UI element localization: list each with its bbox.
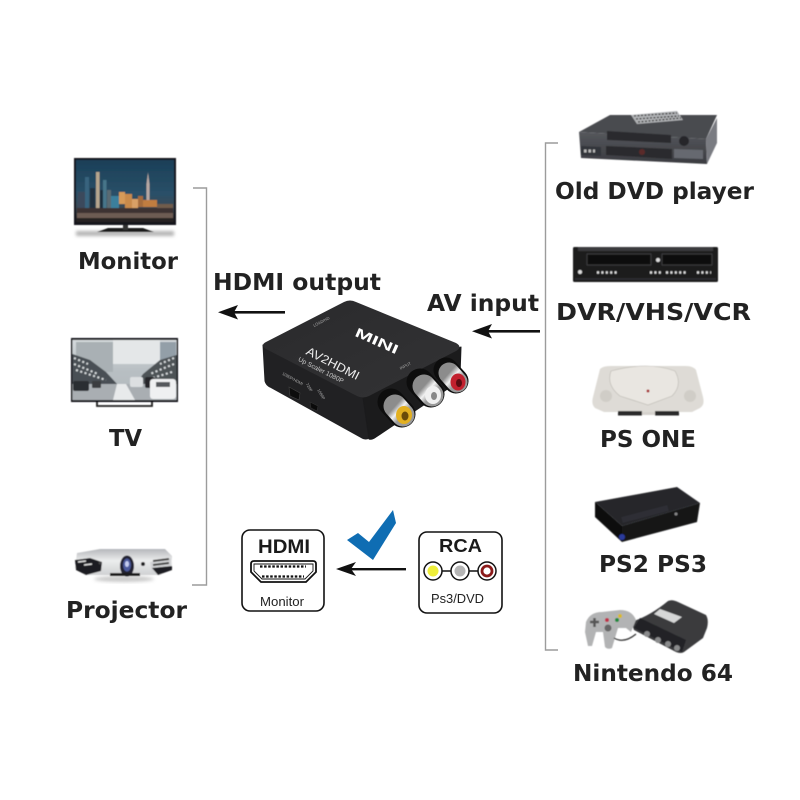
connector: yellow	[391, 402, 412, 424]
icon: PS One	[592, 366, 704, 416]
device text: AV2HDMI: AV2HDMI	[304, 344, 362, 383]
icon: old DVD player	[579, 111, 717, 164]
device HDMI port	[289, 387, 300, 400]
label: Old DVD player: Old DVD player	[555, 179, 755, 205]
icon: monitor	[74, 158, 176, 236]
icon: Nintendo 64	[585, 600, 708, 653]
device top face	[263, 300, 460, 398]
label: Nintendo 64: Nintendo 64	[573, 661, 733, 687]
device right side	[363, 347, 461, 439]
label: TV: TV	[109, 426, 142, 452]
icon: HDMI port	[251, 561, 316, 582]
label: PS ONE: PS ONE	[600, 427, 696, 453]
arrow: HDMI output	[218, 305, 285, 320]
connector: red	[446, 370, 466, 390]
device text: MINI: MINI	[353, 325, 401, 357]
left bracket	[192, 188, 206, 585]
label: HDMI output: HDMI output	[213, 270, 381, 296]
badge title: RCA: RCA	[439, 535, 482, 556]
device text: HDMI port labels: LOAD/HD	[312, 315, 330, 328]
label: PS2 PS3: PS2 PS3	[599, 552, 707, 578]
device text: HDMI port labels: 1080P	[316, 388, 327, 401]
RCA badge	[419, 532, 502, 613]
controller	[585, 610, 636, 649]
HDMI monitor badge	[242, 530, 324, 611]
device left side	[263, 345, 369, 439]
console	[631, 600, 708, 653]
device text: scaler: Up Scaler 1080P	[297, 356, 345, 385]
device text: HDMI port labels: 720P	[305, 382, 314, 393]
arrow: AV input	[472, 324, 540, 338]
icon: PS2	[595, 487, 700, 542]
connector: white	[420, 382, 441, 404]
right bracket	[546, 143, 558, 650]
icon: RCA sockets	[424, 562, 496, 580]
converter device	[263, 300, 466, 439]
badge title: HDMI: HDMI	[258, 537, 310, 558]
icon: TV	[71, 338, 178, 406]
device switch	[310, 402, 318, 411]
device text: HDMI port labels	[281, 315, 412, 401]
arrow: RCA to HDMI	[336, 562, 406, 576]
badge caption: Ps3/DVD: Ps3/DVD	[431, 591, 484, 606]
icon: projector	[75, 549, 172, 582]
label: Projector: Projector	[66, 598, 188, 624]
device text: HDMI port labels: 1080P/HDMI	[281, 371, 304, 386]
icon: DVR/VHS/VCR	[573, 247, 718, 282]
badge caption: Monitor: Monitor	[260, 595, 304, 609]
icon: blue check mark	[347, 510, 396, 560]
label: DVR/VHS/VCR: DVR/VHS/VCR	[556, 300, 751, 326]
device text: HDMI port labels: INPUT	[399, 360, 412, 371]
label: AV input: AV input	[427, 291, 539, 317]
label: Monitor: Monitor	[78, 249, 179, 275]
